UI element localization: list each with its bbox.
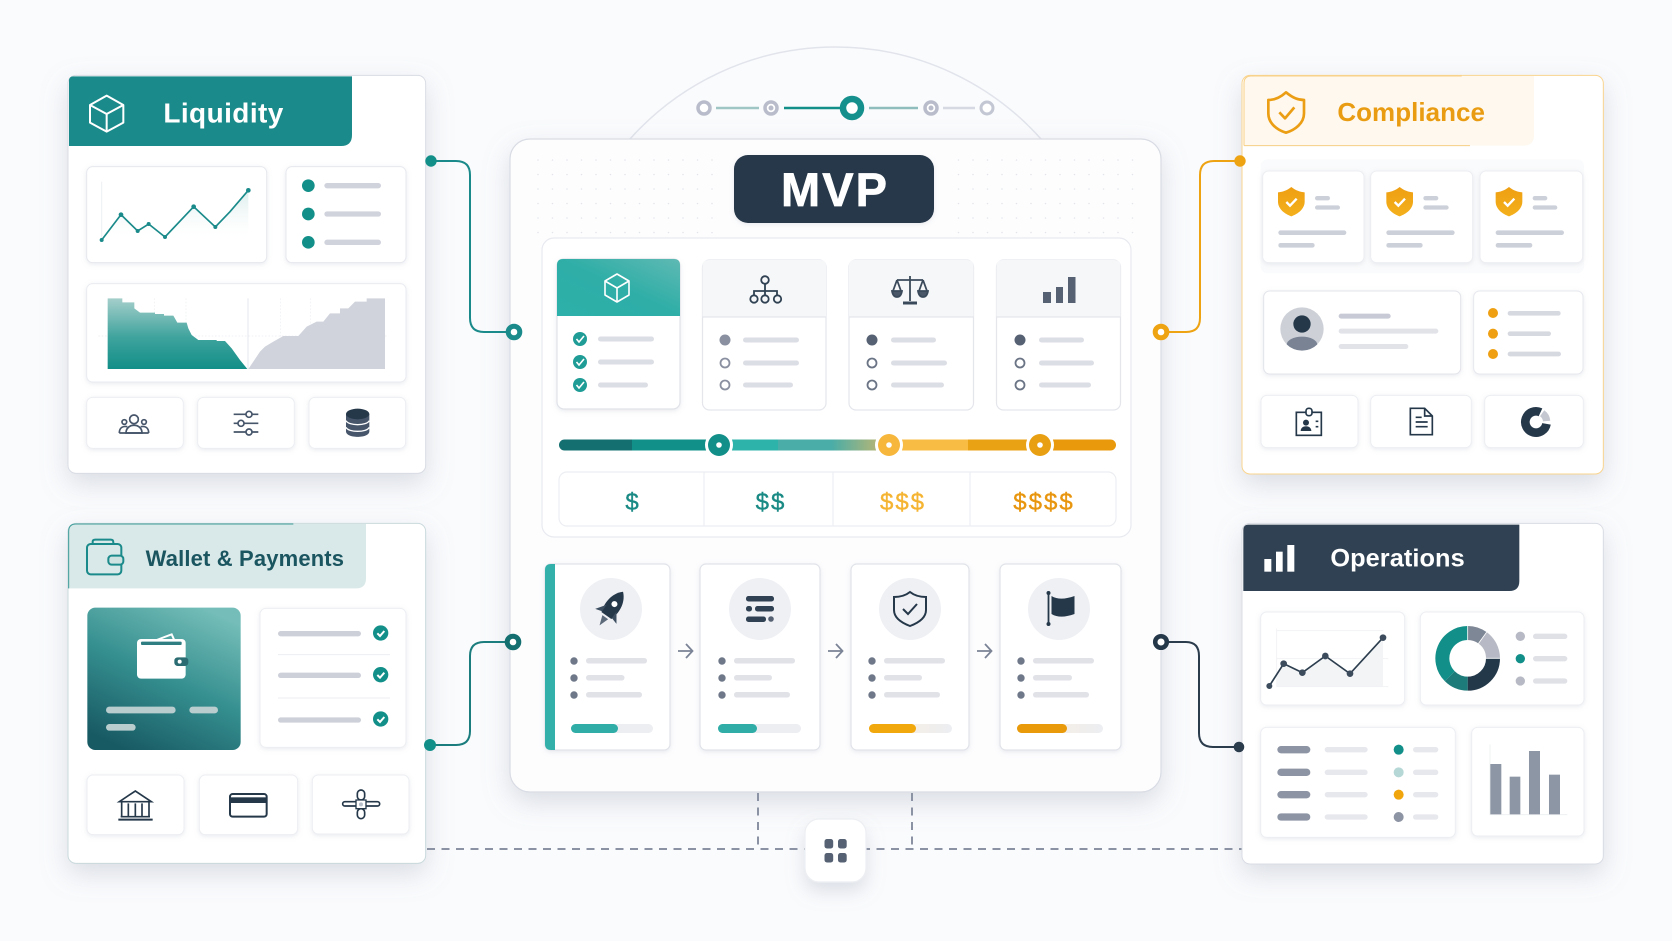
icon: flag	[1046, 591, 1074, 626]
icon: cube	[605, 274, 629, 302]
panel: liquidity	[68, 75, 426, 473]
connector: wallet to MVP	[424, 636, 519, 751]
step card 2	[700, 564, 820, 750]
compliance title: Compliance	[1337, 97, 1485, 127]
operations header	[1243, 525, 1519, 591]
icon card: donut	[1485, 395, 1583, 448]
operations title: Operations	[1330, 545, 1465, 573]
depth area chart card	[87, 284, 406, 382]
wallet title: Wallet & Payments	[146, 546, 344, 571]
shield card 1	[1263, 171, 1364, 263]
connector: compliance to MVP	[1155, 155, 1246, 338]
icon card: credit card	[199, 775, 298, 835]
dot grid right	[945, 155, 1140, 239]
tier card 4	[996, 260, 1120, 410]
list card	[286, 167, 406, 263]
dot grid left	[530, 155, 722, 239]
icon: shield outline	[1268, 92, 1304, 133]
MVP badge	[734, 155, 934, 223]
connector: operations to MVP	[1155, 636, 1244, 752]
shield card 2	[1371, 171, 1473, 263]
price row: $$$	[880, 489, 926, 516]
tier card 1	[557, 259, 680, 409]
price row: $$	[756, 489, 786, 516]
MVP badge: MVP	[781, 163, 887, 216]
icon: bars	[1264, 545, 1294, 572]
icon: wallet white	[137, 634, 188, 679]
icon card: database	[309, 397, 406, 448]
panel: compliance	[1242, 75, 1603, 474]
panel: operations	[1242, 523, 1603, 864]
dashed base line	[427, 793, 1242, 849]
icon: cube	[90, 96, 123, 132]
bar chart card	[1472, 727, 1584, 836]
price row: $	[625, 489, 639, 516]
table card	[1261, 727, 1455, 837]
icon: bars	[1043, 277, 1076, 303]
icon: scales	[892, 276, 928, 303]
donut card	[1420, 612, 1584, 705]
shield row backdrop	[1261, 159, 1584, 273]
icon card: transfer	[312, 775, 409, 834]
pricing slider	[559, 431, 1116, 459]
center control button	[805, 819, 866, 882]
arrow 2	[828, 644, 842, 658]
icon card: document	[1371, 395, 1471, 448]
tier card 2	[702, 260, 826, 410]
icon: wallet outline	[87, 540, 123, 574]
connector: liquidity to MVP	[425, 155, 520, 338]
price row: $$$$	[1013, 489, 1075, 516]
checklist card	[260, 608, 406, 747]
wallet card	[87, 608, 241, 750]
shield card 3	[1480, 171, 1583, 263]
step card 3	[851, 564, 969, 750]
panel: wallet and payments	[68, 523, 426, 863]
panel: MVP center	[510, 139, 1161, 792]
tier panel	[542, 238, 1131, 537]
liquidity header	[69, 76, 352, 146]
liquidity title: Liquidity	[163, 97, 284, 128]
top stepper	[698, 99, 993, 117]
tier card 3	[849, 260, 974, 410]
step card 4	[1000, 564, 1121, 750]
icon card: people	[87, 397, 183, 448]
icon: shield	[894, 592, 926, 626]
top arc	[630, 47, 1041, 139]
icon: hierarchy	[750, 276, 781, 303]
icon: list	[746, 596, 774, 622]
profile card	[1264, 291, 1461, 374]
icon card: bank	[87, 775, 184, 835]
icon card: sliders	[198, 397, 294, 448]
line chart card	[1261, 612, 1405, 705]
icon card: id badge	[1261, 395, 1358, 448]
step card 1	[545, 564, 670, 750]
orange list card	[1474, 291, 1583, 374]
line chart card	[87, 167, 267, 263]
arrow 3	[977, 644, 992, 658]
price row	[559, 472, 1116, 526]
arrow 1	[678, 644, 692, 658]
wallet header	[69, 524, 366, 588]
compliance header	[1244, 76, 1534, 146]
icon: rocket	[589, 584, 634, 633]
